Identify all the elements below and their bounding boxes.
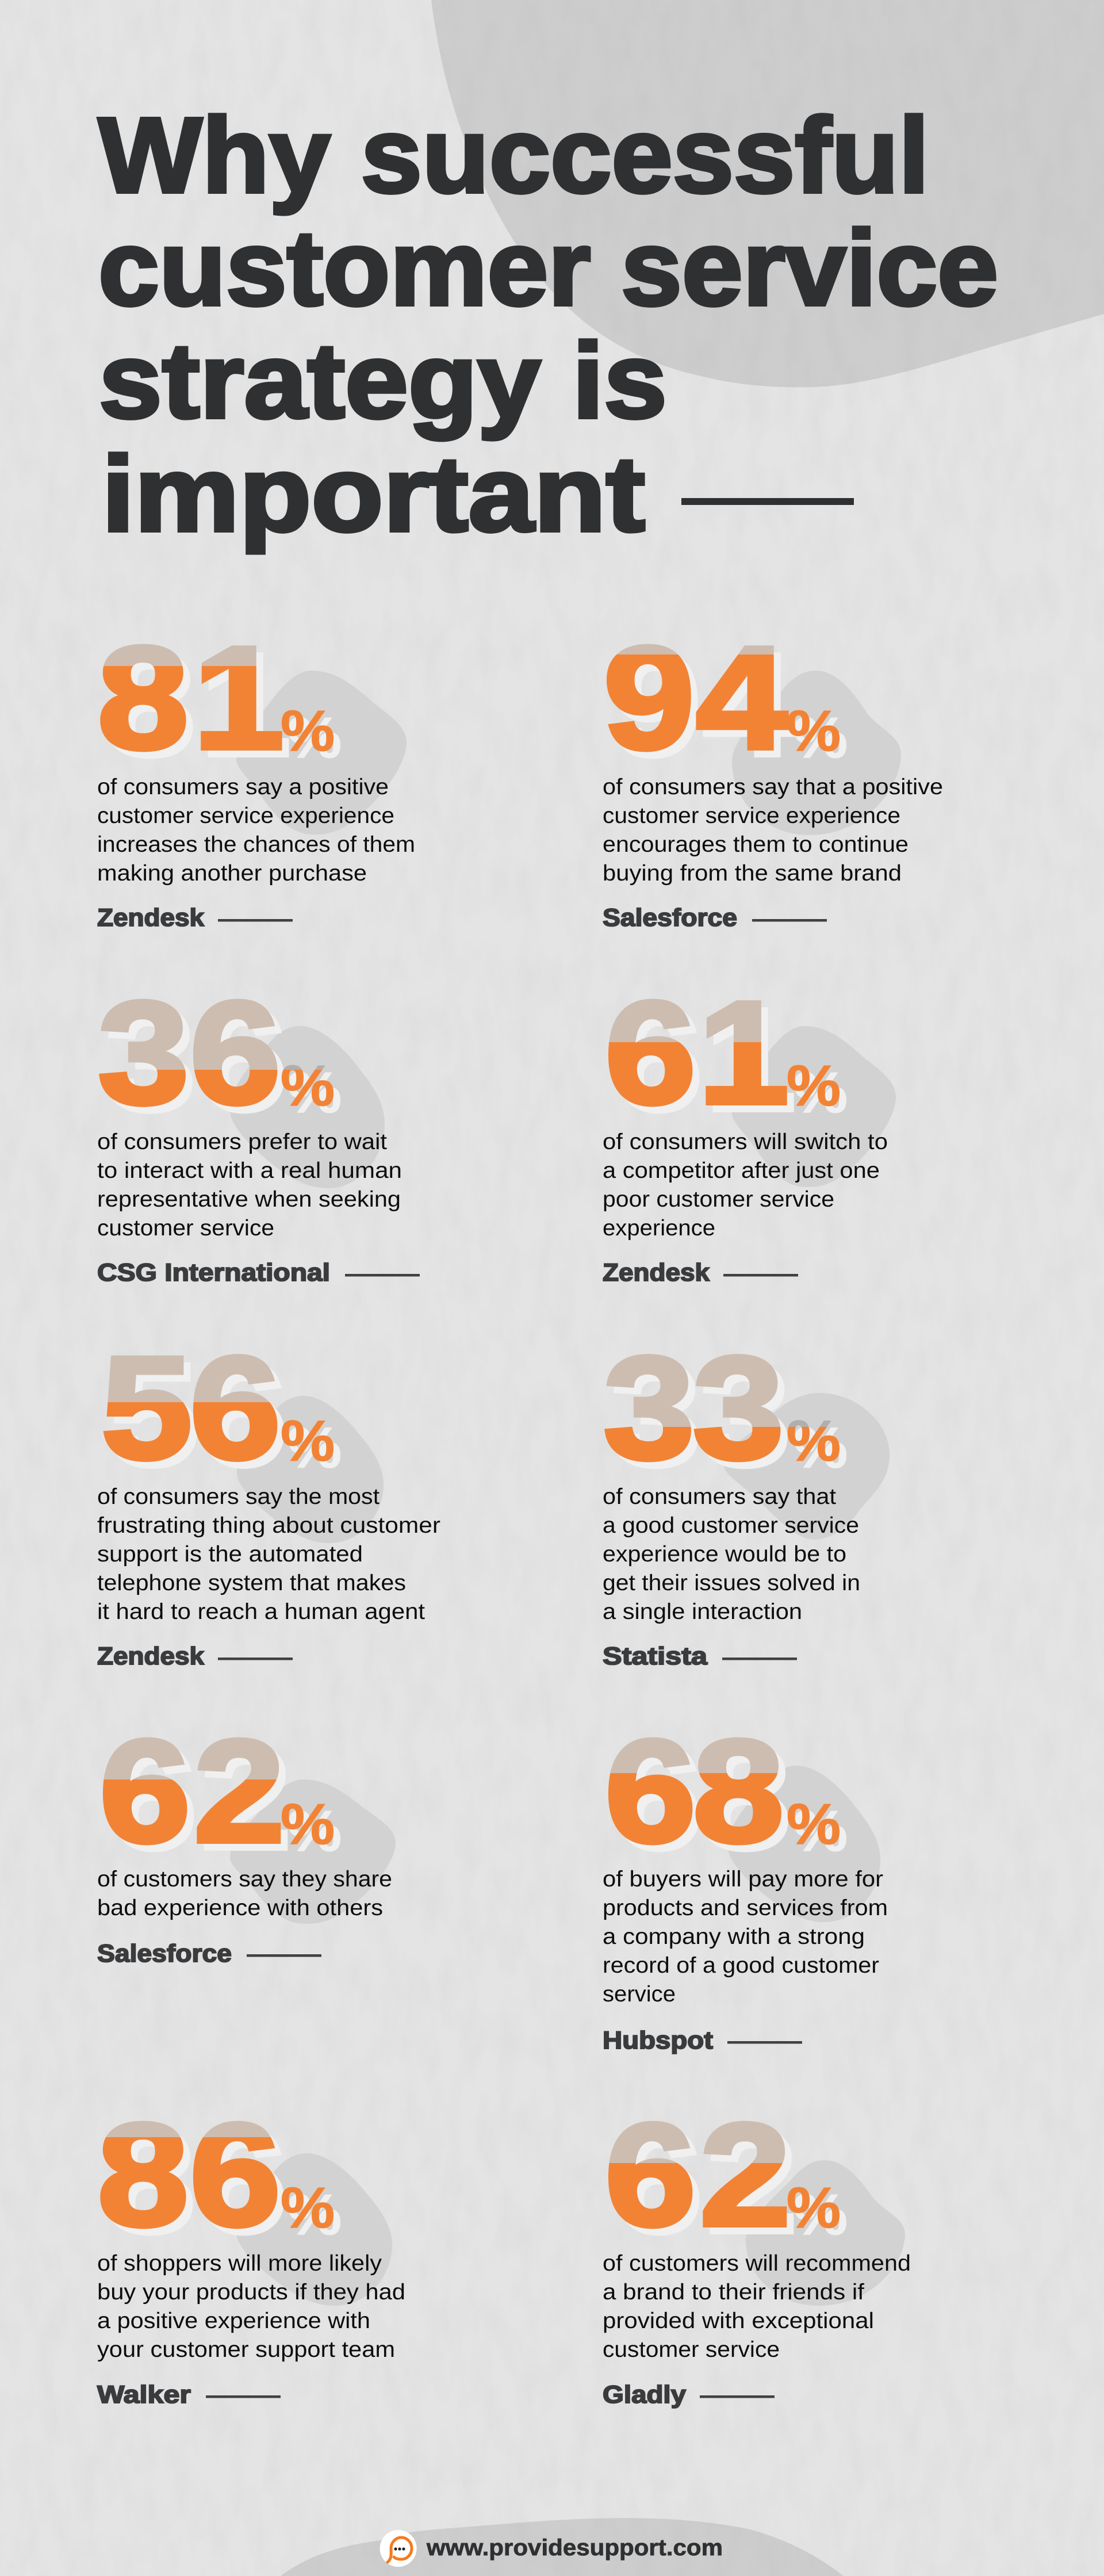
description: support is the automated (97, 1542, 363, 1567)
number: 61%: 61 (605, 971, 789, 1134)
blob (236, 671, 407, 835)
blob (746, 2160, 905, 2306)
description: of consumers say that (603, 1484, 836, 1509)
panel: stat 62% share (97, 1709, 396, 1968)
panel: stat 33% (603, 1326, 890, 1670)
blob (237, 1396, 384, 1543)
number: 68%: 68 (612, 1716, 791, 1880)
description: increases the chances of them (97, 832, 415, 857)
description: representative when seeking (97, 1187, 401, 1212)
description: of shoppers will more likely (97, 2251, 382, 2276)
description: a single interaction (603, 1599, 802, 1624)
number: 68%: 68 (605, 1709, 784, 1873)
number: 94%: % (787, 699, 841, 763)
number: 61%: % (793, 1061, 848, 1125)
source: Zendesk (603, 1259, 710, 1287)
description: bad experience with others (97, 1896, 383, 1920)
footer: logo and website (380, 2530, 723, 2567)
description (97, 1130, 402, 1241)
source (603, 1259, 798, 1287)
description (603, 1867, 888, 2007)
source: Walker (97, 2381, 191, 2409)
number: 33%: % (787, 1409, 841, 1473)
number: 56%: 56 (101, 1326, 281, 1490)
number: 81%: % (288, 706, 342, 770)
panel: stat 61% (603, 971, 896, 1287)
number: 81%: % (281, 699, 335, 763)
description (603, 1484, 860, 1624)
description: customer service experience (603, 803, 900, 828)
blob (732, 1026, 896, 1187)
number: 94%: 94 (611, 623, 794, 786)
top right blob (431, 0, 1104, 387)
title: Why successful (98, 96, 929, 215)
source: Hubspot (603, 2027, 713, 2054)
description: of buyers will pay more for (603, 1867, 883, 1892)
blob (723, 1393, 890, 1540)
number: 62%: % (288, 1799, 342, 1863)
description (603, 775, 943, 886)
number: 61%: 61 (612, 978, 796, 1141)
description: of customers say they share (97, 1867, 392, 1892)
source: CSG International (97, 1259, 330, 1287)
description: a company with a strong (603, 1924, 865, 1949)
number: 62%: % (281, 1792, 335, 1857)
number: 36%: % (288, 1061, 342, 1125)
description: get their issues solved in (603, 1571, 860, 1595)
blob (230, 1026, 385, 1188)
description: of consumers prefer to wait (97, 1130, 387, 1154)
description: of consumers say the most (97, 1484, 379, 1509)
description: buying from the same brand (603, 861, 902, 886)
source: Gladly (603, 2381, 686, 2409)
panel: stat 36% (97, 971, 420, 1287)
description: of consumers will switch to (603, 1130, 888, 1154)
number: 62%: % (787, 2176, 841, 2240)
panel: stat 81% (97, 616, 415, 932)
footer blob (281, 2518, 844, 2576)
number: 61%: % (787, 1054, 841, 1118)
number: 62%: 62 (605, 2093, 791, 2256)
description (603, 1130, 888, 1241)
number: 36%: % (281, 1054, 335, 1118)
number: 86%: 86 (105, 2100, 288, 2263)
number: 86%: % (281, 2176, 335, 2240)
number: 62%: 62 (612, 2100, 798, 2263)
number: 62%: 62 (99, 1709, 285, 1873)
number: 36%: 36 (105, 978, 288, 1141)
description: products and services from (603, 1896, 888, 1920)
number: 56%: % (281, 1409, 335, 1473)
title: customer service (98, 209, 998, 328)
description: frustrating thing about customer (97, 1513, 440, 1538)
description: experience (603, 1216, 715, 1241)
description: customer service experience (97, 803, 394, 828)
number: 94%: % (793, 706, 848, 770)
description: a good customer service (603, 1513, 859, 1538)
number: 36%: 36 (98, 971, 281, 1134)
source (97, 2381, 281, 2409)
description: buy your products if they had (97, 2280, 405, 2305)
source (603, 1643, 797, 1670)
description: of consumers say a positive (97, 775, 389, 799)
description: customer service (97, 1216, 274, 1241)
number: 62%: % (793, 2183, 848, 2247)
description (603, 2251, 911, 2362)
source (603, 904, 827, 932)
description: a brand to their friends if (603, 2280, 864, 2305)
description: making another purchase (97, 861, 367, 886)
number: 56%: % (288, 1416, 342, 1480)
panel: stat 94% (603, 616, 943, 932)
source: Statista (603, 1643, 708, 1670)
description: encourages them to continue (603, 832, 908, 857)
description (97, 2251, 405, 2362)
description: it hard to reach a human agent (97, 1599, 425, 1624)
source (97, 1643, 293, 1670)
source (97, 904, 293, 932)
description: poor customer service (603, 1187, 834, 1212)
panel: stat 62% recommend (603, 2093, 911, 2409)
source: Salesforce (97, 1940, 232, 1968)
description: experience would be to (603, 1542, 846, 1567)
blob (230, 1779, 396, 1924)
description: of consumers say that a positive (603, 775, 943, 799)
number: 81%: 81 (98, 616, 284, 779)
title: important (102, 435, 645, 554)
source: Zendesk (97, 1643, 204, 1670)
icon: chat logo (380, 2530, 417, 2567)
number: 86%: % (288, 2183, 342, 2247)
number: 68%: % (793, 1799, 848, 1863)
description: a competitor after just one (603, 1158, 880, 1183)
description: your customer support team (97, 2337, 395, 2362)
description (97, 1484, 440, 1624)
description: record of a good customer (603, 1953, 879, 1978)
title: strategy is (99, 321, 667, 441)
description: a positive experience with (97, 2309, 370, 2333)
description: customer service (603, 2337, 780, 2362)
description: of customers will recommend (603, 2251, 911, 2276)
number: 62%: 62 (106, 1716, 292, 1880)
title (98, 96, 998, 554)
number: 33%: % (793, 1416, 848, 1480)
description: telephone system that makes (97, 1571, 406, 1595)
description: service (603, 1982, 676, 2007)
number: 56%: 56 (108, 1333, 288, 1496)
blob (236, 2153, 392, 2306)
panel: stat 86% (97, 2093, 405, 2409)
description: to interact with a real human (97, 1158, 402, 1183)
blob (728, 1766, 880, 1922)
panel: stat 68% (603, 1709, 888, 2054)
source (603, 2027, 802, 2054)
number: 86%: 86 (98, 2093, 281, 2256)
blob (732, 671, 901, 835)
source (97, 1259, 420, 1287)
number: 33%: 33 (604, 1326, 784, 1490)
number: 81%: 81 (105, 623, 291, 786)
description (97, 1867, 392, 1920)
number: 33%: 33 (611, 1333, 791, 1496)
source: Zendesk (97, 904, 204, 932)
website: www.providesupport.com (426, 2535, 723, 2560)
description (97, 775, 415, 886)
source (603, 2381, 775, 2409)
description: provided with exceptional (603, 2309, 874, 2333)
number: 68%: % (787, 1792, 841, 1857)
source (97, 1940, 321, 1968)
number: 94%: 94 (604, 616, 787, 779)
source: Salesforce (603, 904, 737, 932)
panel: stat 56% (97, 1326, 440, 1670)
